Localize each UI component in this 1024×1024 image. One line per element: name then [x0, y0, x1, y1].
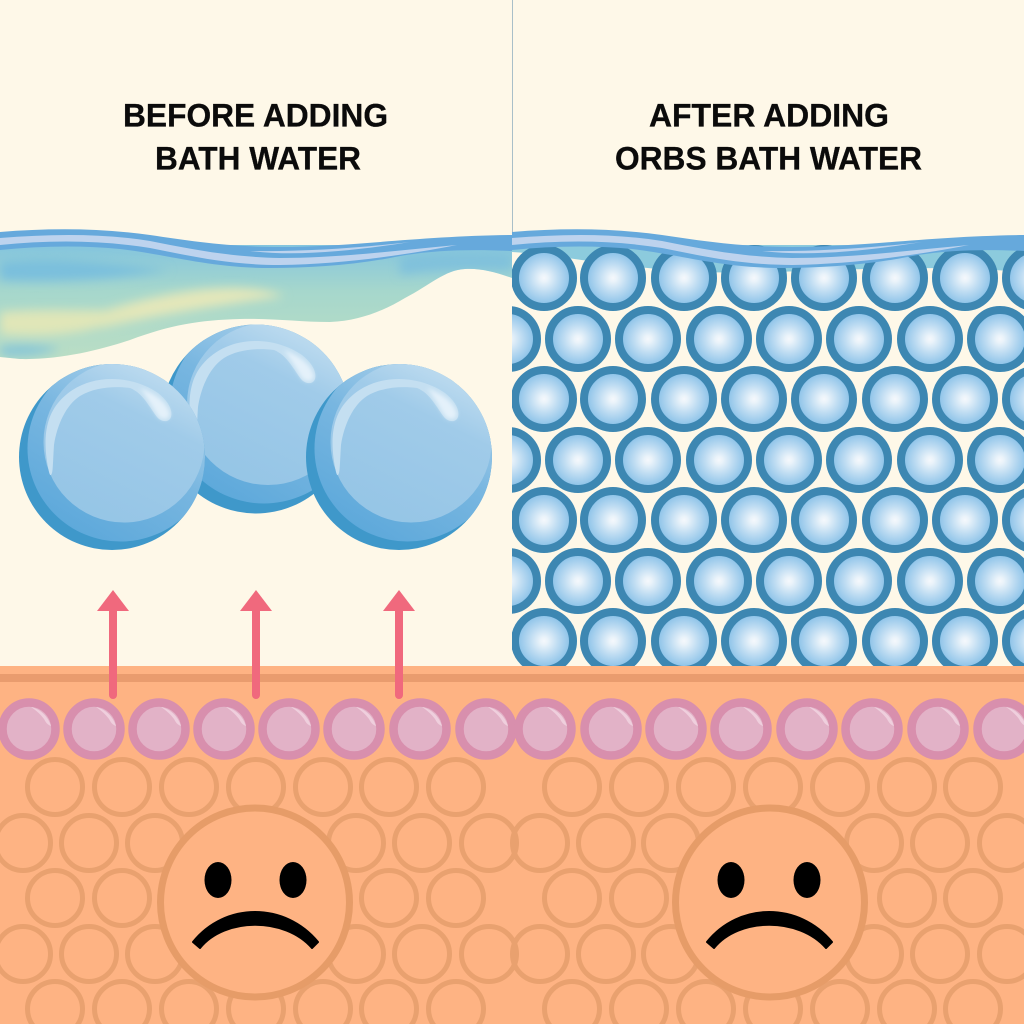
right panel: water behind orbs — [512, 245, 1024, 272]
icon: sad face left — [160, 808, 350, 997]
heading: after adding orbs bath water: AFTER ADDING — [649, 98, 889, 134]
arrow: up centre — [240, 590, 272, 699]
pink cell row — [2, 702, 1024, 756]
skin cells: left — [0, 760, 516, 1024]
skin layer — [0, 666, 1024, 1024]
arrow: up left — [97, 590, 129, 699]
skin surface band — [0, 674, 1024, 682]
left panel: water surface wave — [0, 229, 512, 268]
big orb: right — [306, 356, 500, 550]
left panel: coloured bath water — [0, 245, 512, 361]
skin cells: right — [512, 760, 1024, 1024]
heading: after adding orbs bath water: ORBS BATH WATER — [615, 140, 922, 176]
big orb: centre — [168, 324, 344, 514]
big orb: left — [19, 356, 214, 550]
right panel: packed orb lattice — [479, 249, 1024, 670]
heading: after adding orbs bath water — [615, 98, 922, 176]
icon: sad face right — [676, 808, 864, 997]
heading: before adding bath water: BATH WATER — [155, 140, 361, 176]
right panel: water surface wave — [512, 229, 1024, 268]
arrow: up right — [383, 590, 415, 699]
heading: before adding bath water — [123, 98, 388, 176]
heading: before adding bath water: BEFORE ADDING — [123, 98, 388, 134]
panel divider — [512, 0, 513, 240]
